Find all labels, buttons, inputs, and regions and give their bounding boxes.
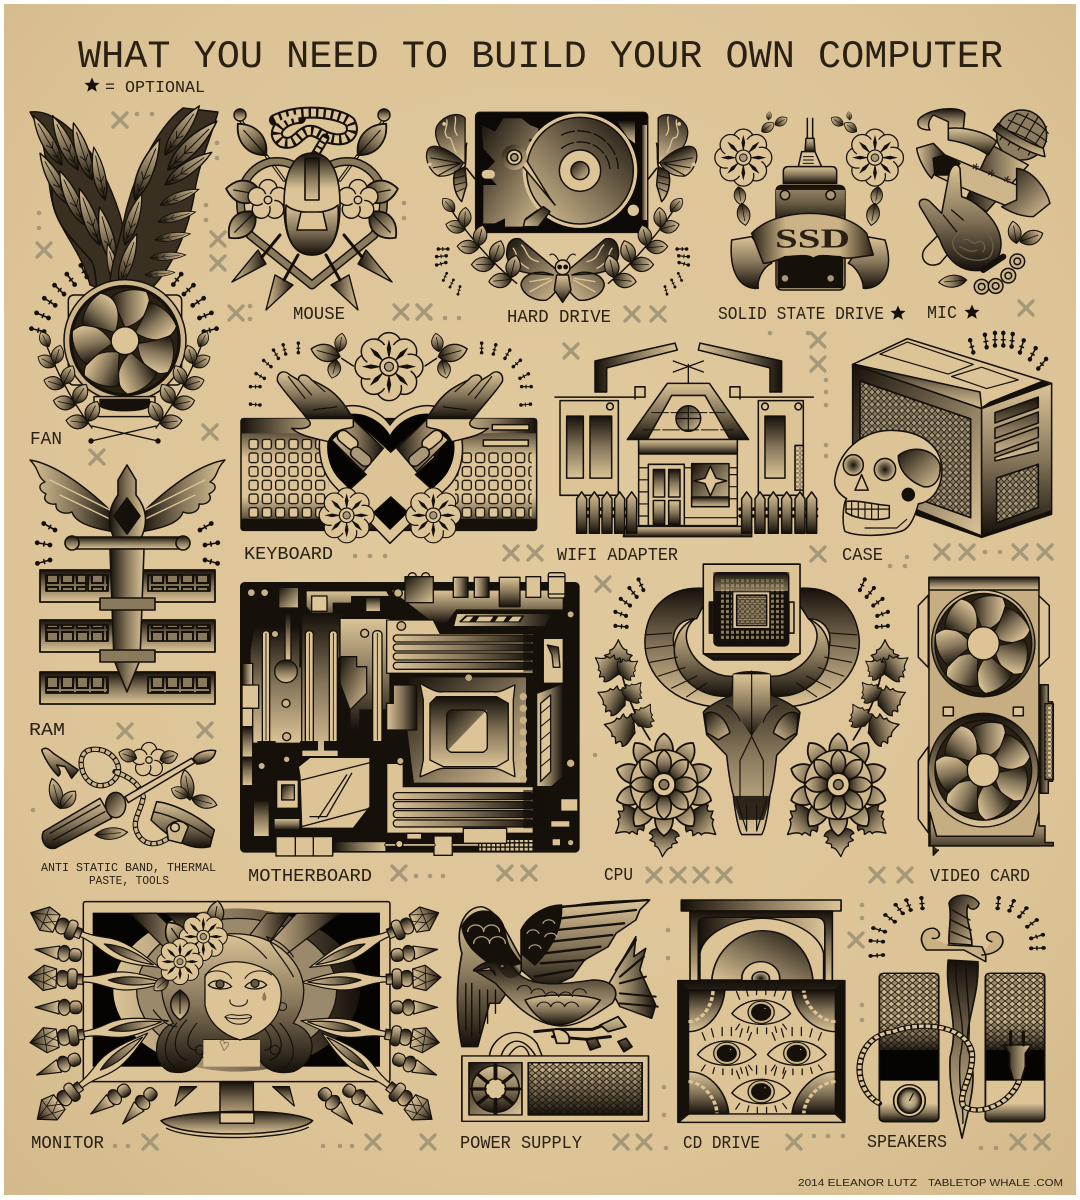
label: PASTE, TOOLS xyxy=(89,874,169,888)
legend: star = optional: = OPTIONAL xyxy=(105,79,205,98)
sword xyxy=(65,465,190,692)
screen frame xyxy=(83,902,390,1082)
antennas xyxy=(555,343,813,399)
memory slots top xyxy=(387,620,543,673)
credit: TABLETOP WHALE .COM xyxy=(928,1177,1063,1189)
tick marks xyxy=(29,263,219,334)
right hand and sleeve xyxy=(397,372,503,472)
capacitors xyxy=(520,693,527,783)
flowers xyxy=(246,180,380,222)
memory slots bottom xyxy=(387,763,543,833)
heart xyxy=(319,406,462,543)
mic handle xyxy=(923,145,1028,265)
horns xyxy=(645,588,859,707)
disc xyxy=(523,113,637,228)
panel: cd drive xyxy=(678,900,845,1122)
skull xyxy=(835,430,942,535)
panel: hard drive xyxy=(418,108,705,328)
label: FAN xyxy=(30,430,62,450)
crossed arrows xyxy=(230,109,394,180)
cpu label: CPU xyxy=(604,866,633,886)
oak leaves xyxy=(587,640,916,858)
bottom flowers xyxy=(319,488,461,543)
dagger xyxy=(921,895,1003,1138)
flower and leaves xyxy=(46,742,219,841)
fan one xyxy=(932,590,1035,697)
ticks xyxy=(869,897,1045,958)
expansion slots xyxy=(258,631,387,750)
board xyxy=(241,583,579,852)
ticks xyxy=(968,331,1048,371)
optional star xyxy=(890,306,906,320)
hair xyxy=(153,934,312,1073)
right spears xyxy=(273,901,444,1129)
label: HARD DRIVE xyxy=(507,308,611,328)
eyes xyxy=(697,986,826,1113)
top flower xyxy=(355,333,423,401)
wings xyxy=(30,460,225,532)
ram sticks xyxy=(40,570,215,704)
pliers xyxy=(42,748,78,778)
right heat sink xyxy=(537,683,563,787)
ssd banner xyxy=(731,213,888,288)
rope xyxy=(275,113,352,160)
speakers xyxy=(879,973,1045,1122)
bottom moth xyxy=(507,239,619,302)
fan body xyxy=(64,280,186,417)
ticks xyxy=(249,342,532,407)
case label: CASE xyxy=(842,546,883,566)
corner scallops xyxy=(688,990,836,1114)
eagle far wing xyxy=(457,907,525,1047)
branch and cables xyxy=(490,1017,632,1055)
banner xyxy=(917,109,1050,217)
panel: power supply xyxy=(457,900,658,1121)
bull skull xyxy=(703,671,800,835)
panel: mouse xyxy=(221,109,404,325)
right wing xyxy=(110,102,222,295)
panel: case xyxy=(835,331,1052,537)
ticks xyxy=(35,521,220,566)
wrist band xyxy=(151,802,214,848)
left slot region xyxy=(242,613,390,786)
front box xyxy=(678,981,845,1122)
speakers label: SPEAKERS xyxy=(867,1133,947,1153)
flowers xyxy=(614,733,888,836)
psu box xyxy=(462,1056,648,1121)
brain xyxy=(953,227,993,260)
panel: speakers xyxy=(860,895,1045,1138)
left hand and sleeve xyxy=(277,372,383,472)
bracket xyxy=(918,595,1053,833)
leaves xyxy=(938,220,1045,288)
keyboard xyxy=(241,419,537,530)
mouse body xyxy=(284,153,340,255)
left wing xyxy=(28,112,127,295)
panel: keyboard xyxy=(241,332,537,565)
optional star xyxy=(964,304,980,319)
card body xyxy=(929,577,1053,855)
left spears xyxy=(26,901,197,1129)
cd drive label: CD DRIVE xyxy=(683,1134,760,1154)
top regions xyxy=(279,573,565,683)
chipset block xyxy=(277,757,370,828)
monitor stand xyxy=(161,1082,313,1138)
ssd body xyxy=(776,118,845,290)
drive case xyxy=(476,112,648,232)
panel: solid state drive xyxy=(715,109,1050,325)
video card label: VIDEO CARD xyxy=(930,867,1030,887)
ticks xyxy=(614,577,890,629)
eagle body xyxy=(474,961,616,1026)
motherboard label: MOTHERBOARD xyxy=(248,867,372,887)
panel: monitor xyxy=(26,900,444,1138)
heart outline and chevron xyxy=(240,162,384,285)
hand xyxy=(919,165,1003,271)
wifi adapter label: WIFI ADAPTER xyxy=(557,546,678,566)
cable links xyxy=(974,254,1025,294)
fence xyxy=(577,492,817,537)
mic label: MIC xyxy=(927,304,957,324)
top leaves xyxy=(309,332,469,380)
rope xyxy=(860,1026,1019,1110)
ticks xyxy=(435,248,690,295)
tray xyxy=(681,900,841,995)
monitor label: MONITOR xyxy=(31,1134,104,1154)
label: RAM xyxy=(29,721,65,741)
moths xyxy=(418,108,483,202)
power supply label: POWER SUPPLY xyxy=(460,1134,582,1154)
left tower xyxy=(560,401,618,495)
radiating blades xyxy=(130,913,340,970)
banner: *** xyxy=(964,159,1014,196)
panel: video card xyxy=(918,577,1053,855)
fan two xyxy=(928,713,1038,827)
mic head xyxy=(993,110,1048,160)
panel: ram xyxy=(29,460,225,741)
screwdriver xyxy=(42,750,216,849)
panel: wifi adapter xyxy=(555,343,817,537)
right tower xyxy=(758,401,803,495)
label: ANTI STATIC BAND, THERMAL xyxy=(41,861,216,875)
arrow heads xyxy=(232,235,392,310)
bottom connectors xyxy=(253,799,578,856)
label: SOLID STATE DRIVE xyxy=(718,305,884,325)
plug xyxy=(1004,1032,1031,1080)
flowers and vines xyxy=(715,111,903,226)
face xyxy=(203,962,281,1067)
label: KEYBOARD xyxy=(244,545,333,565)
chip xyxy=(703,564,800,660)
house xyxy=(627,361,749,526)
label xyxy=(41,861,216,888)
crossed arms xyxy=(350,445,432,512)
panel: fan xyxy=(18,102,230,450)
leaves xyxy=(221,178,404,246)
label: MOUSE xyxy=(293,305,345,325)
panel: cpu xyxy=(587,564,916,858)
ssd banner: SSD xyxy=(775,223,850,253)
eagle tail xyxy=(608,937,658,1018)
panel: anti static band, thermal paste, tools xyxy=(41,742,219,888)
flower crown xyxy=(150,900,227,1020)
panel: motherboard xyxy=(241,573,579,856)
laurels xyxy=(18,322,230,443)
eagle near wing xyxy=(521,900,650,990)
credit: 2014 ELEANOR LUTZ xyxy=(798,1177,918,1189)
right moth xyxy=(641,108,705,202)
title: WHAT YOU NEED TO BUILD YOUR OWN COMPUTER xyxy=(78,35,1003,79)
credit xyxy=(798,1177,1063,1189)
cpu socket xyxy=(387,674,527,783)
mounting holes xyxy=(248,589,575,846)
case body xyxy=(853,339,1052,537)
laurels xyxy=(423,184,702,301)
actuator arm xyxy=(502,145,555,227)
rope xyxy=(81,749,168,844)
